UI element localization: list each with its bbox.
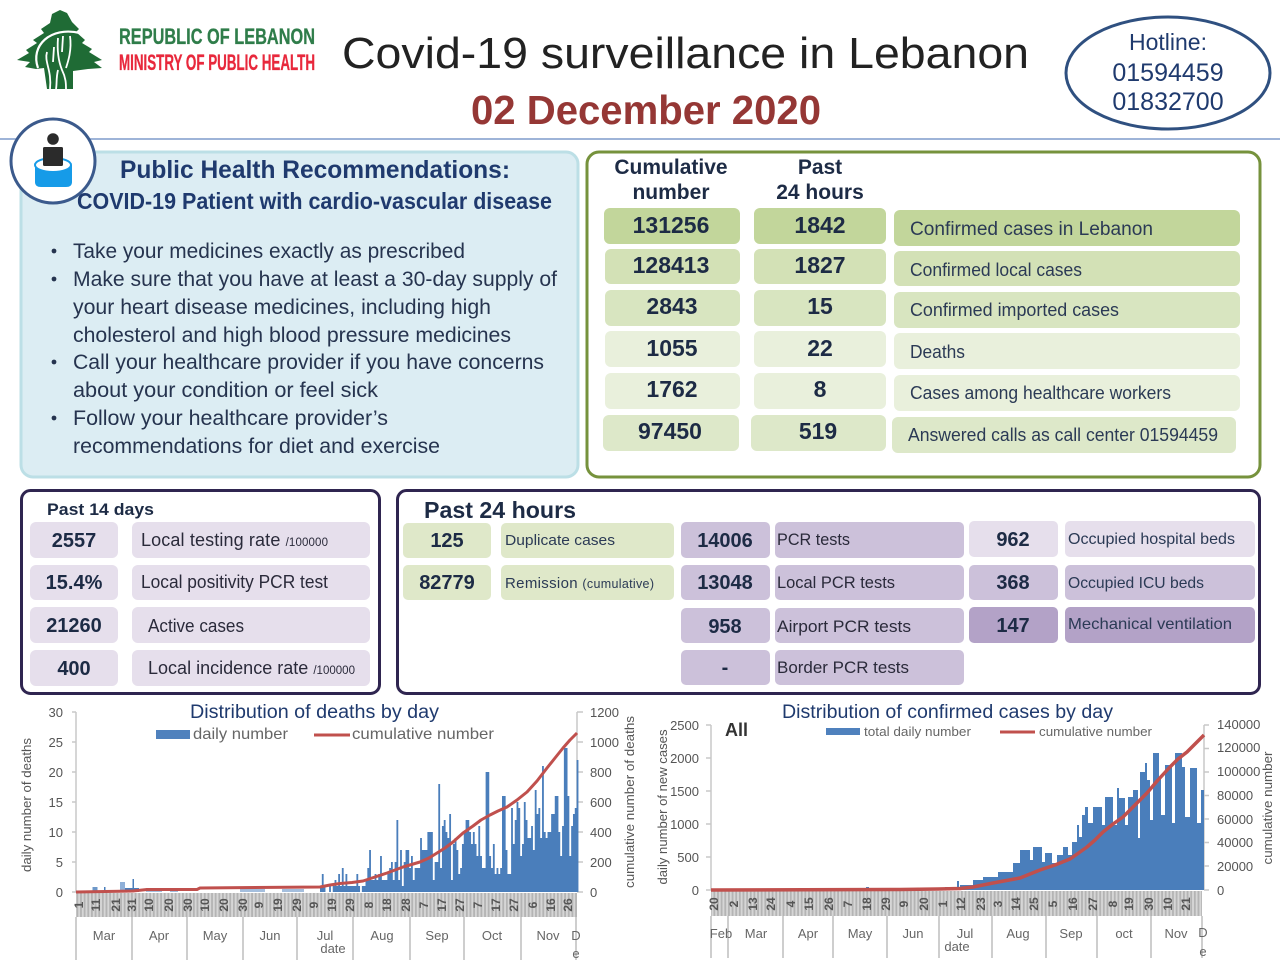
- row: border PCR tests: -: [722, 657, 728, 679]
- day labels: 7: [417, 901, 431, 908]
- month labels: Apr: [149, 928, 170, 943]
- day labels: 30: [236, 898, 250, 912]
- month labels: [710, 916, 1208, 959]
- row: occupied hospital beds: Occupied hospital beds: [1068, 531, 1235, 548]
- row: local positivity: [30, 565, 370, 600]
- day labels: 16: [1066, 897, 1080, 911]
- row: airport PCR tests: Airport PCR tests: [777, 617, 911, 636]
- row: confirmed imported cases: Confirmed imported cases: [910, 300, 1119, 320]
- day labels: 26: [561, 898, 575, 912]
- day labels: 20: [162, 898, 176, 912]
- day labels: 8: [362, 901, 376, 908]
- row: deaths: Deaths: [910, 342, 965, 362]
- day labels: 20: [917, 897, 931, 911]
- axes: 30: [49, 705, 63, 720]
- row: local testing rate: Local testing rate /100000: [141, 530, 328, 550]
- month labels: Aug: [370, 928, 394, 943]
- row: deaths: [605, 331, 1240, 369]
- chart title: Distribution of deaths by day: [190, 702, 440, 723]
- row: local testing rate: 2557: [52, 530, 96, 552]
- row: active cases: [30, 607, 370, 643]
- row: confirmed cases in Lebanon: 1842: [794, 212, 846, 238]
- row: local PCR tests: [681, 565, 964, 600]
- axes: 1200: [590, 705, 619, 720]
- row: remission: [403, 565, 674, 600]
- day labels: 18: [380, 898, 394, 912]
- row: confirmed imported cases: 2843: [646, 293, 698, 319]
- row: local testing rate: [30, 522, 370, 558]
- day labels: 21: [1179, 897, 1193, 911]
- label: all: All: [725, 720, 748, 740]
- axes: 0: [590, 885, 597, 900]
- text block: bullet list: Take your medicines exactly as prescribed: [73, 240, 465, 263]
- row: answered calls: 519: [799, 418, 837, 444]
- legend: [826, 724, 1153, 739]
- month labels: Jul: [317, 928, 333, 943]
- month labels: date: [320, 941, 346, 956]
- day labels: 20: [217, 898, 231, 912]
- month labels: oct: [1115, 926, 1133, 941]
- day labels: 13: [746, 897, 760, 911]
- axes: 5: [56, 855, 63, 870]
- month labels: May: [848, 926, 873, 941]
- day labels: 19: [271, 898, 285, 912]
- day labels: 8: [1106, 900, 1120, 907]
- hotline callout: 01832700: [1112, 88, 1224, 116]
- axes: 0: [692, 883, 699, 898]
- row: healthcare workers: [605, 373, 1240, 411]
- heading: cumulative number: Cumulative: [614, 156, 728, 179]
- row: mechanical ventilation: [969, 607, 1255, 643]
- row: answered calls: [603, 415, 1236, 453]
- heading: past 14 days: Past 14 days: [47, 500, 154, 519]
- day labels: 3: [991, 900, 1005, 907]
- legend: daily number: [193, 726, 289, 743]
- chart: distribution of deaths by day: [19, 702, 637, 960]
- text block: bullet list: Follow your healthcare provider’s: [73, 407, 388, 430]
- axes: cumulative number of deaths: [622, 715, 637, 888]
- chart: distribution of confirmed cases by day: [655, 702, 1275, 959]
- axes: 200: [590, 855, 612, 870]
- axes: 800: [590, 765, 612, 780]
- row: healthcare workers: 8: [814, 376, 827, 402]
- axes: 10: [49, 825, 63, 840]
- row: duplicate cases: [403, 523, 674, 558]
- day labels: 7: [841, 900, 855, 907]
- month labels: e: [1199, 944, 1207, 959]
- day labels: 10: [198, 898, 212, 912]
- text: ministry of public health: MINISTRY OF PUBLIC HEALTH: [119, 50, 315, 75]
- hotline callout: 01594459: [1112, 59, 1224, 87]
- text block: bullet list: cholesterol and high blood pressure medicines: [73, 324, 511, 347]
- day labels: 30: [1142, 897, 1156, 911]
- day labels: 17: [489, 898, 503, 912]
- day labels: 7: [471, 901, 485, 908]
- day labels: 5: [1046, 900, 1060, 907]
- row: confirmed cases in Lebanon: 131256: [633, 212, 709, 238]
- day labels: 16: [544, 898, 558, 912]
- axes: cumulative number: [1260, 751, 1275, 864]
- row: PCR tests: [681, 522, 964, 558]
- axes: 2000: [670, 751, 699, 766]
- day labels: 2: [727, 900, 741, 907]
- row: occupied hospital beds: 962: [996, 529, 1030, 551]
- date: 02 December 2020: [471, 87, 821, 133]
- day labels: 30: [181, 898, 195, 912]
- day labels: 20: [707, 897, 721, 911]
- day labels: 29: [343, 898, 357, 912]
- row: border PCR tests: [681, 650, 964, 685]
- axes: 500: [677, 850, 699, 865]
- chart title: Distribution of confirmed cases by day: [782, 702, 1114, 723]
- row: confirmed cases in Lebanon: Confirmed cases in Lebanon: [910, 219, 1153, 240]
- text block: bullet list: [52, 240, 557, 458]
- month labels: Mar: [745, 926, 768, 941]
- row: PCR tests: 14006: [697, 530, 753, 552]
- axes: 25: [49, 735, 63, 750]
- axes: 140000: [1217, 717, 1260, 732]
- day labels: 27: [1086, 897, 1100, 911]
- row: occupied ICU beds: 368: [996, 572, 1030, 594]
- row: remission: 82779: [419, 572, 475, 594]
- month labels: D: [1198, 925, 1208, 940]
- icon: cedar tree: [17, 10, 102, 89]
- month labels: Nov: [536, 928, 560, 943]
- row: confirmed cases in Lebanon: [604, 208, 1240, 246]
- row: healthcare workers: 1762: [646, 376, 698, 402]
- axes: 60000: [1217, 812, 1253, 827]
- month labels: D: [571, 928, 581, 943]
- axes: 2500: [670, 718, 699, 733]
- month labels: date: [944, 939, 970, 954]
- month labels: Nov: [1164, 926, 1188, 941]
- axes: 400: [590, 825, 612, 840]
- day labels: 14: [1009, 897, 1023, 911]
- day labels: 19: [325, 898, 339, 912]
- text block: bullet list: your heart disease medicines, including high: [73, 296, 491, 319]
- day labels: 1: [936, 900, 950, 907]
- row: mechanical ventilation: 147: [996, 615, 1030, 637]
- axes: [19, 705, 637, 900]
- legend: cumulative number: [352, 726, 495, 743]
- row: remission: Remission (cumulative): [505, 575, 654, 592]
- line: cumulative cases: [711, 735, 1204, 890]
- heading: cumulative number: number: [632, 181, 710, 204]
- axes: 100000: [1217, 764, 1260, 779]
- axes: daily number of new cases: [655, 729, 670, 884]
- date strip: [711, 891, 1202, 916]
- row: airport PCR tests: [681, 608, 964, 643]
- day labels: 15: [802, 897, 816, 911]
- day labels: 10: [1161, 897, 1175, 911]
- text block: bullet list: about your condition or feel sick: [73, 379, 379, 402]
- row: occupied hospital beds: [969, 521, 1255, 557]
- day labels: 17: [435, 898, 449, 912]
- panel: past 24 hours: [398, 490, 1260, 694]
- heading: past 24 hours: Past 24 hours: [424, 497, 576, 523]
- row: deaths: 22: [807, 335, 833, 361]
- day labels: 11: [89, 898, 103, 911]
- axes: 0: [56, 885, 63, 900]
- text block: bullet list: recommendations for diet and exercise: [73, 435, 440, 458]
- row: answered calls: 97450: [638, 418, 702, 444]
- line: cumulative deaths: [76, 733, 577, 892]
- month labels: Jun: [903, 926, 923, 941]
- row: confirmed imported cases: 15: [807, 293, 833, 319]
- bars: daily cases: [866, 753, 1204, 890]
- row: PCR tests: PCR tests: [777, 530, 850, 549]
- axes: 1500: [670, 784, 699, 799]
- hotline callout: Hotline:: [1129, 29, 1207, 55]
- axes: 0: [1217, 883, 1224, 898]
- day labels: [72, 898, 575, 912]
- day labels: 12: [954, 897, 968, 911]
- month labels: Sep: [425, 928, 449, 943]
- month labels: Aug: [1006, 926, 1030, 941]
- row: duplicate cases: Duplicate cases: [505, 532, 615, 549]
- hotline callout: [1066, 17, 1270, 129]
- legend: total daily number: [864, 724, 972, 739]
- legend: [156, 726, 495, 743]
- month labels: Jul: [957, 926, 973, 941]
- heading: patient group: COVID-19 Patient with cardio-vascular disease: [77, 188, 552, 214]
- axes: 120000: [1217, 740, 1260, 755]
- heading: past 24 hours: Past: [798, 156, 842, 179]
- row: mechanical ventilation: Mechanical ventilation: [1068, 616, 1232, 633]
- day labels: 19: [1122, 897, 1136, 911]
- row: occupied ICU beds: Occupied ICU beds: [1068, 575, 1204, 592]
- month labels: Oct: [482, 928, 502, 943]
- month labels: Mar: [93, 928, 116, 943]
- panel: case counts table: [587, 152, 1260, 477]
- axes: 20: [49, 765, 63, 780]
- month labels: Sep: [1059, 926, 1083, 941]
- row: confirmed local cases: 1827: [794, 252, 846, 278]
- row: local PCR tests: Local PCR tests: [777, 573, 895, 592]
- row: local PCR tests: 13048: [697, 572, 753, 594]
- axes: [655, 717, 1275, 898]
- day labels: 28: [399, 898, 413, 912]
- row: answered calls: Answered calls as call center 01594459: [908, 425, 1218, 445]
- month labels: [76, 917, 581, 960]
- row: incidence rate: Local incidence rate /100000: [148, 658, 355, 678]
- month labels: Apr: [798, 926, 819, 941]
- day labels: 6: [526, 901, 540, 908]
- day labels: 4: [784, 900, 798, 907]
- axes: 80000: [1217, 788, 1253, 803]
- axes: 1000: [590, 735, 619, 750]
- axes: 15: [49, 795, 63, 810]
- heading: past 24 hours: 24 hours: [776, 181, 864, 204]
- date strip: [76, 893, 577, 917]
- panel: public health recommendations: [21, 152, 578, 477]
- day labels: 31: [125, 898, 139, 912]
- row: local positivity: Local positivity PCR test: [141, 572, 328, 592]
- row: healthcare workers: Cases among healthcare workers: [910, 383, 1171, 403]
- axes: daily number of deaths: [19, 737, 34, 872]
- axes: 40000: [1217, 835, 1253, 850]
- row: airport PCR tests: 958: [708, 616, 742, 638]
- day labels: 25: [1027, 897, 1041, 911]
- day labels: 23: [974, 897, 988, 911]
- axes: 1000: [670, 817, 699, 832]
- axes: 600: [590, 795, 612, 810]
- row: confirmed local cases: [605, 249, 1240, 286]
- heading: recommendations: Public Health Recommendations:: [120, 156, 510, 184]
- day labels: 27: [507, 898, 521, 912]
- text block: bullet list: Call your healthcare provider if you have concerns: [73, 351, 544, 374]
- day labels: 26: [822, 897, 836, 911]
- ministry logo: [17, 10, 315, 89]
- title: Covid-19 surveillance in Lebanon: [342, 29, 1029, 78]
- day labels: 9: [252, 901, 266, 908]
- month labels: May: [203, 928, 228, 943]
- legend: cumulative number: [1039, 724, 1153, 739]
- row: active cases: Active cases: [148, 616, 244, 636]
- text: republic of lebanon: REPUBLIC OF LEBANON: [119, 24, 315, 49]
- row: incidence rate: [30, 650, 370, 686]
- row: incidence rate: 400: [57, 658, 91, 680]
- row: border PCR tests: Border PCR tests: [777, 658, 909, 677]
- month labels: Jun: [260, 928, 280, 943]
- row: confirmed local cases: 128413: [633, 252, 709, 278]
- day labels: 27: [453, 898, 467, 912]
- day labels: 9: [307, 901, 321, 908]
- day labels: 29: [290, 898, 304, 912]
- text block: bullet list: Make sure that you have at least a 30-day supply of: [73, 268, 557, 291]
- row: confirmed local cases: Confirmed local cases: [910, 260, 1082, 280]
- day labels: 18: [860, 897, 874, 911]
- month labels: Feb: [710, 926, 732, 941]
- day labels: 24: [764, 897, 778, 911]
- day labels: 10: [142, 898, 156, 912]
- axes: 20000: [1217, 859, 1253, 874]
- row: duplicate cases: 125: [430, 530, 464, 552]
- row: deaths: 1055: [646, 335, 698, 361]
- day labels: 1: [72, 901, 86, 908]
- day labels: 29: [879, 897, 893, 911]
- panel: past 14 days: [22, 490, 380, 694]
- day labels: 9: [897, 900, 911, 907]
- row: confirmed imported cases: [605, 290, 1240, 328]
- bars: daily deaths: [92, 748, 578, 892]
- row: local positivity: 15.4%: [46, 572, 103, 594]
- row: occupied ICU beds: [969, 565, 1255, 600]
- icon: patient badge: [11, 119, 95, 203]
- day labels: 21: [109, 898, 123, 912]
- day labels: [707, 897, 1193, 911]
- row: active cases: 21260: [46, 615, 102, 637]
